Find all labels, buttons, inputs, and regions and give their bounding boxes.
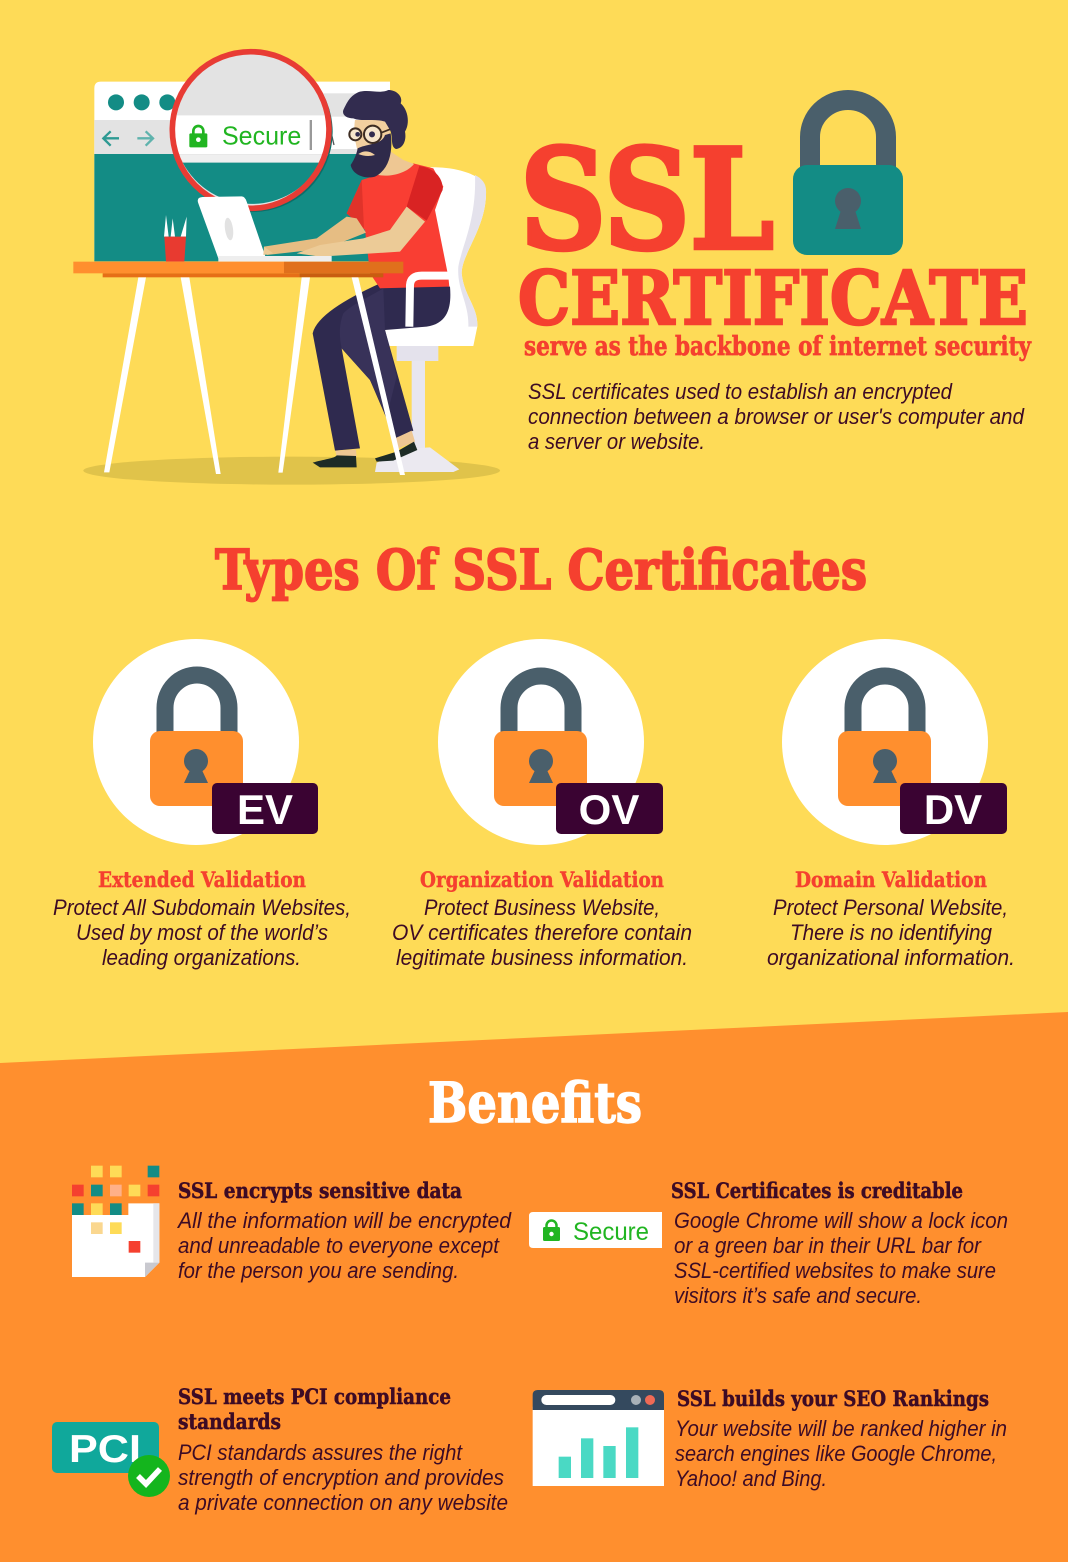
laptop [198, 196, 332, 262]
heading: benefits: Benefits [428, 1070, 642, 1135]
heading: SSL builds your SEO Rankings [677, 1386, 989, 1411]
description: leading organizations. [102, 945, 301, 970]
label: Extended Validation [98, 867, 306, 892]
panel: PCI compliance [52, 1384, 508, 1515]
label: Domain Validation [795, 867, 987, 892]
description: legitimate business information. [396, 945, 688, 970]
icon: PCI badge: PCI [69, 1428, 141, 1471]
panel: SEO rankings [533, 1386, 1007, 1491]
description [767, 895, 1015, 970]
heading: SSL Certificates is creditable [671, 1178, 963, 1203]
description [392, 895, 692, 970]
icon: EV lock [93, 639, 318, 845]
heading: standards [178, 1409, 281, 1434]
desk [73, 262, 405, 475]
heading: SSL encrypts sensitive data [178, 1178, 462, 1203]
panel: benefits background [0, 1012, 1068, 1562]
description: search engines like Google Chrome, [675, 1441, 997, 1466]
description: a private connection on any website [178, 1490, 508, 1515]
icon: browser with bar chart [533, 1390, 664, 1486]
icon: secure badge: Secure [573, 1218, 649, 1246]
description: and unreadable to everyone except [178, 1233, 500, 1258]
description: Your website will be ranked higher in [675, 1416, 1007, 1441]
description: Protect Personal Website, [773, 895, 1008, 920]
floor shadow [83, 457, 500, 485]
icon: OV lock [438, 639, 663, 845]
description: or a green bar in their URL bar for [674, 1233, 983, 1258]
magnifier showing Secure address bar [172, 52, 333, 212]
intro text [528, 379, 1025, 454]
description: Protect Business Website, [424, 895, 660, 920]
person [264, 90, 450, 467]
panel: certificates creditable [529, 1178, 1008, 1308]
icon: DV lock: DV [924, 786, 982, 833]
heading [178, 1384, 451, 1434]
description [675, 1416, 1007, 1491]
label: Organization Validation [420, 867, 664, 892]
description: All the information will be encrypted [176, 1208, 512, 1233]
title: SSL: SSL [520, 118, 774, 281]
armrest [409, 276, 449, 327]
description: organizational information. [767, 945, 1015, 970]
office chair [375, 167, 486, 472]
description: Protect All Subdomain Websites, [53, 895, 351, 920]
icon: secure badge [529, 1212, 662, 1248]
heading: types of SSL certificates: Types Of SSL Certificates [215, 537, 867, 602]
browser window [94, 82, 390, 261]
intro text: SSL certificates used to establish an encrypted [528, 379, 953, 404]
description: SSL-certified websites to make sure [674, 1258, 996, 1283]
panel: domain validation [767, 639, 1015, 970]
description [53, 895, 351, 970]
description: OV certificates therefore contain [392, 920, 692, 945]
description: There is no identifying [790, 920, 993, 945]
pen cup [164, 215, 187, 262]
icon: OV lock: OV [579, 786, 639, 833]
illustration: person working at desk with browser [73, 52, 500, 485]
description: Used by most of the world’s [76, 920, 328, 945]
intro text: connection between a browser or user's computer and [528, 404, 1025, 429]
icon: teal padlock [793, 100, 903, 255]
description [674, 1208, 1008, 1308]
description [178, 1440, 508, 1515]
icon: encrypted document [72, 1166, 159, 1277]
description [176, 1208, 512, 1283]
description: visitors it’s safe and secure. [674, 1283, 922, 1308]
description: for the person you are sending. [178, 1258, 459, 1283]
icon: PCI badge [52, 1422, 170, 1497]
description: PCI standards assures the right [178, 1440, 463, 1465]
icon: EV lock: EV [237, 786, 293, 833]
icon: DV lock [782, 639, 1007, 845]
panel: extended validation [53, 639, 351, 970]
description: strength of encryption and provides [178, 1465, 504, 1490]
heading: SSL meets PCI compliance [178, 1384, 451, 1409]
magnifier showing Secure address bar: Secure [222, 121, 301, 151]
panel: encrypts sensitive data [72, 1166, 512, 1283]
intro text: a server or website. [528, 429, 705, 454]
description: Google Chrome will show a lock icon [674, 1208, 1008, 1233]
description: Yahoo! and Bing. [675, 1466, 827, 1491]
panel: organization validation [392, 639, 692, 970]
